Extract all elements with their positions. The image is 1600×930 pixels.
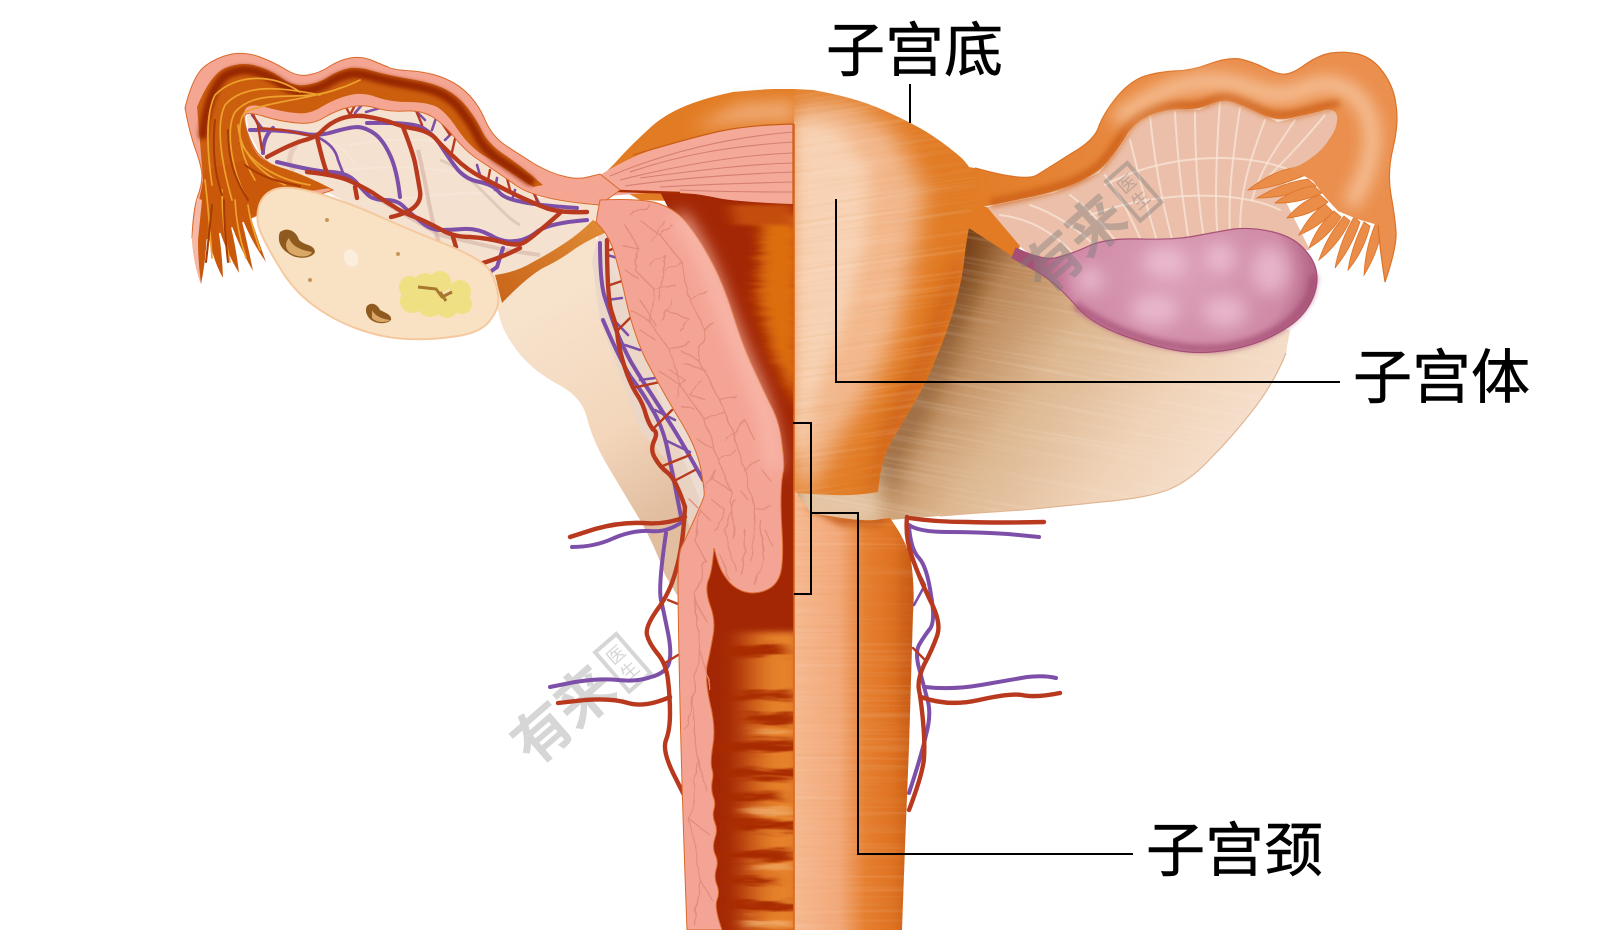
left broad ligament bbox=[495, 225, 700, 600]
watermark right: 医 bbox=[1114, 171, 1141, 198]
watermark right: 生 bbox=[1128, 187, 1154, 214]
tube body bbox=[955, 52, 1397, 282]
right tube and fimbriae bbox=[955, 52, 1397, 282]
pointer line: corpus bbox=[836, 199, 1340, 382]
cervix bracket bbox=[793, 423, 811, 594]
left lateral vessels below ligament bbox=[550, 507, 685, 797]
left ovary ligament cord bbox=[495, 220, 613, 303]
right ovary bbox=[1012, 228, 1317, 352]
back dome of uterus, left half bbox=[600, 89, 795, 205]
watermark left bbox=[500, 630, 656, 778]
small ovary spots bbox=[308, 218, 400, 282]
left uterus myometrium band bbox=[543, 124, 793, 204]
label: fundus: 子宫底 bbox=[826, 18, 1003, 84]
muscle striations bbox=[610, 132, 793, 192]
watermark left: 生 bbox=[617, 658, 643, 685]
ovary follicle bulges bbox=[1076, 242, 1288, 328]
watermark left: 有 bbox=[500, 691, 586, 778]
tube outer wall bbox=[185, 53, 620, 240]
tube inner lumen bbox=[197, 64, 543, 240]
left mesosalpinx window bbox=[246, 100, 602, 280]
highlight on back dome bbox=[690, 100, 795, 128]
watermark right: 来 bbox=[1053, 183, 1139, 270]
rugae highlights bbox=[745, 730, 791, 926]
endometrial capillaries bbox=[622, 205, 772, 925]
fimbriae bbox=[192, 160, 285, 284]
left mesosalpinx arteries bbox=[252, 100, 587, 263]
right lateral vessels bbox=[907, 517, 1060, 810]
right half of uterus body bbox=[794, 89, 974, 496]
right mesosalpinx bbox=[987, 98, 1338, 270]
watermark right: 有 bbox=[1011, 220, 1097, 307]
tube highlight bbox=[1115, 81, 1372, 205]
endometrium light outer layer bbox=[678, 215, 774, 470]
endometrium bbox=[596, 200, 784, 930]
right ovarian ligament band bbox=[950, 200, 1020, 258]
pointer line: cervix bbox=[811, 513, 1133, 854]
uterine cavity and vaginal canal bbox=[660, 193, 794, 930]
left ovary bbox=[257, 188, 498, 339]
tube outline bbox=[975, 52, 1397, 282]
fimbria outer pink edge bbox=[192, 198, 202, 284]
corpus luteum bbox=[399, 271, 472, 318]
label: cervix: 子宫颈 bbox=[1146, 818, 1323, 884]
watermark left: 来 bbox=[542, 654, 628, 741]
radial membrane fibres bbox=[1000, 102, 1325, 260]
ovary lower shadow bbox=[1075, 275, 1314, 349]
lumen dark rim bbox=[203, 70, 530, 181]
right broad ligament bbox=[797, 228, 1290, 520]
label: corpus: 子宫体 bbox=[1353, 345, 1530, 411]
left tube and fimbriae bbox=[185, 53, 620, 284]
midline cut edge bbox=[793, 124, 795, 930]
pointer line: fundus bbox=[909, 84, 911, 123]
left descending vessel ladder bbox=[592, 230, 705, 530]
rugae stripes bbox=[731, 642, 794, 912]
follicle cavities bbox=[279, 230, 391, 323]
watermark left: 医 bbox=[603, 642, 630, 669]
fimbrial streaks bbox=[205, 78, 360, 262]
tube inner shade bbox=[990, 96, 1340, 203]
membrane folds in window bbox=[275, 139, 540, 255]
watermark right bbox=[1011, 159, 1167, 307]
right half of cervix bbox=[794, 490, 915, 930]
left mesosalpinx veins bbox=[250, 100, 587, 272]
fimbria fingers bbox=[1248, 168, 1383, 275]
